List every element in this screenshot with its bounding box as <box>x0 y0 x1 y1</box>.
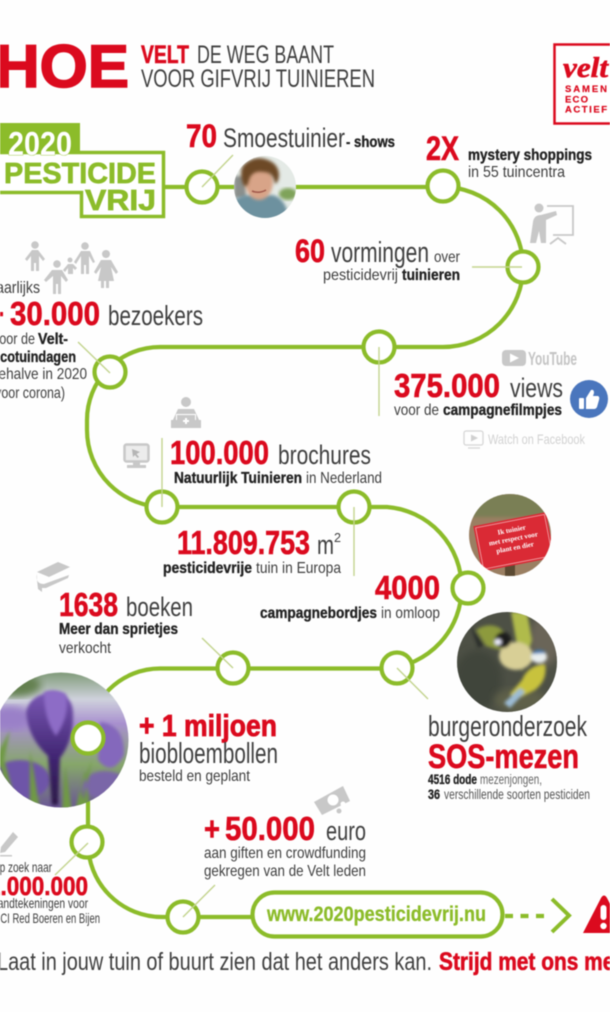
text: jaarlijks 30.000 bezoekers: bezoekers <box>108 300 203 331</box>
icon: trainer at board <box>530 204 573 244</box>
text: +50.000 euro: euro <box>326 816 366 846</box>
text: 2X mystery shoppings <box>426 130 592 181</box>
icon: YouTube <box>502 349 577 369</box>
text: +50.000 euro: aan giften en crowdfunding <box>204 845 366 862</box>
text: 70 Smoestuinier-shows: Smoestuinier <box>223 123 345 153</box>
text: 4000 campagnebordjes <box>260 569 440 622</box>
logo: Velt samen eco actief: ECO <box>565 94 588 106</box>
logo: Velt samen eco actief: SAMEN <box>565 84 607 95</box>
text: burgeronderzoek SOS-mezen: mezenjongen, <box>480 771 542 787</box>
text: 1638 boeken: Meer dan sprietjes <box>59 621 178 638</box>
logo: Velt samen eco actief: ACTIEF <box>565 104 607 116</box>
text: 375.000 views <box>394 367 563 419</box>
icon: book with bookmark <box>37 562 70 592</box>
icon and text: watch on Facebook: Watch on Facebook <box>488 431 586 447</box>
icon and text: watch on Facebook <box>464 431 586 448</box>
icon: YouTube: YouTube <box>528 349 577 369</box>
text: burgeronderzoek SOS-mezen: 4516 dode <box>428 771 477 787</box>
text: 11.809.753 m2: 11.809.753 <box>177 524 310 561</box>
text: 100.000 brochures: 100.000 <box>170 434 269 471</box>
photo: red campaign sign: Ik tuinier <box>497 523 526 537</box>
arrow: dashed to warning <box>505 899 569 932</box>
badge: 2020 pesticide vrij: 2020 <box>8 125 72 162</box>
text: 4000 campagnebordjes: 4000 <box>375 569 440 606</box>
icon: reader with book <box>171 397 201 428</box>
text: 60 vormingen: tuinieren <box>402 267 460 284</box>
badge: 2020 pesticide vrij: VRIJ <box>85 185 156 217</box>
text: 60 vormingen: 60 <box>295 233 325 269</box>
heading: Velt de weg baant voor gifvrij tuinieren <box>141 41 375 93</box>
call to action: Laat in jouw tuin of buurt zien dat het anders kan. <box>0 948 432 976</box>
logo: Velt samen eco actief: velt <box>563 53 609 84</box>
text: 375.000 views: views <box>510 373 563 403</box>
text: 1638 boeken: 1638 <box>59 586 118 623</box>
text: +50.000 euro: 50.000 <box>225 810 315 847</box>
route line <box>87 187 523 917</box>
icon: banknote <box>314 786 350 815</box>
text: 2X mystery shoppings: 2X <box>426 130 459 168</box>
icon: warning triangle <box>583 896 610 933</box>
text: 4000 campagnebordjes: campagnebordjes <box>260 605 377 622</box>
icon: computer screen <box>124 444 148 468</box>
logo: Velt samen eco actief <box>554 44 610 124</box>
text: 1638 boeken: boeken <box>126 592 193 622</box>
text: burgeronderzoek SOS-mezen <box>428 711 590 802</box>
pointer lines <box>55 155 522 917</box>
website pill <box>252 892 502 936</box>
text: 70 Smoestuinier-shows <box>186 118 395 154</box>
heading: Velt de weg baant voor gifvrij tuinieren: DE WEG BAANT <box>197 41 334 69</box>
text: +1 miljoen biobloembollen <box>139 708 278 785</box>
heading: Velt de weg baant voor gifvrij tuinieren: VOOR GIFVRIJ TUINIEREN <box>141 65 375 93</box>
text: +50.000 euro: + <box>204 810 220 847</box>
icon: facebook like <box>570 380 608 418</box>
heading: Velt de weg baant voor gifvrij tuinieren: VELT <box>141 41 189 69</box>
text: 100.000 brochures: brochures <box>278 440 371 470</box>
text: 2X mystery shoppings: in 55 tuincentra <box>468 164 565 181</box>
text: 1638 boeken: verkocht <box>59 640 111 657</box>
text: 100.000 brochures <box>170 434 382 487</box>
text: 375.000 views: campagnefilmpjes <box>443 402 562 419</box>
text: 4000 campagnebordjes: in omloop <box>381 605 440 622</box>
text: 1638 boeken <box>59 586 193 657</box>
text: 11.809.753 m2: m <box>317 530 334 560</box>
text: burgeronderzoek SOS-mezen: 36 <box>428 786 440 802</box>
badge: 2020 pesticide vrij: PESTICIDE <box>4 158 156 190</box>
route nodes <box>72 170 538 932</box>
text: op zoek naar 1.000.000 handtekeningen <box>0 859 100 926</box>
text: 11.809.753 m2: 2 <box>334 530 341 545</box>
photo: red campaign sign: met respect voor <box>488 530 539 548</box>
text: 11.809.753 m2: pesticidevrije <box>163 560 252 577</box>
photo: tits on a feeder <box>454 611 561 713</box>
text: 60 vormingen <box>295 233 461 284</box>
text: 60 vormingen: vormingen <box>331 237 429 269</box>
text: 60 vormingen: over <box>434 249 461 266</box>
text: 100.000 brochures: in Nederland <box>306 470 382 487</box>
text: 70 Smoestuinier-shows: - shows <box>346 134 395 151</box>
text: 11.809.753 m2 <box>163 524 341 577</box>
text: 375.000 views: 375.000 <box>394 367 500 404</box>
photo: red campaign sign: plant en dier <box>496 540 535 555</box>
text: +1 miljoen biobloembollen: besteld en geplant <box>139 768 250 785</box>
text: +50.000 euro: gekregen van de Velt leden <box>204 863 366 880</box>
text: 100.000 brochures: Natuurlijk Tuinieren <box>174 470 302 487</box>
badge: 2020 pesticide vrij <box>0 123 164 217</box>
text: +1 miljoen biobloembollen: + 1 miljoen <box>139 708 277 743</box>
photo: presenter portrait <box>234 156 297 222</box>
text: 11.809.753 m2: tuin in Europa <box>256 560 341 577</box>
text: jaarlijks 30.000 bezoekers <box>0 278 203 402</box>
text: jaarlijks 30.000 bezoekers: 30.000 <box>10 295 100 332</box>
text: jaarlijks 30.000 bezoekers: Velt- <box>38 331 68 348</box>
text: +1 miljoen biobloembollen: biobloembollen <box>139 738 278 770</box>
website pill: www.2020pesticidevrij.nu <box>266 903 486 926</box>
text: 375.000 views: voor de <box>394 402 439 419</box>
text: 60 vormingen: pesticidevrij <box>323 267 398 284</box>
photo: purple crocus <box>0 672 129 810</box>
icon: pen <box>0 832 18 856</box>
text: +50.000 euro <box>204 810 366 880</box>
photo: red campaign sign <box>468 493 555 580</box>
text: 70 Smoestuinier-shows: 70 <box>186 118 217 154</box>
icon: family <box>25 241 118 294</box>
